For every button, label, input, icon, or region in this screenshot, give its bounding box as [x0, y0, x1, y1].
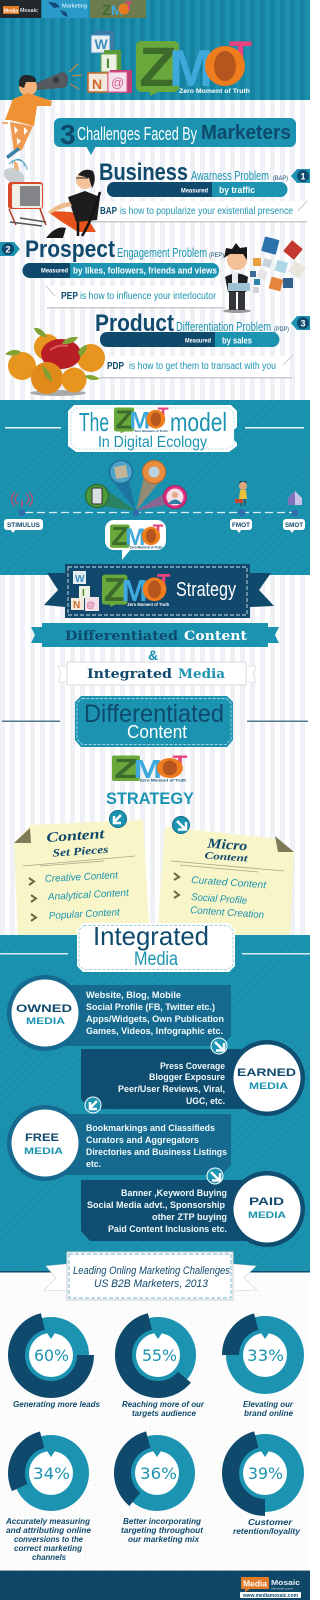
- ZMOT logo: header: T: [229, 32, 252, 79]
- heading: 3 challenges faced by marketers: [54, 118, 296, 155]
- ZMOT logo: model title: [114, 404, 169, 435]
- chart: donut 33 percent: [226, 1316, 304, 1418]
- heading: micro content: Micro: [206, 837, 248, 854]
- top navigation strip: Media: [4, 8, 19, 14]
- chart: donut 55 percent: targets audience: [132, 1409, 197, 1418]
- icons: social media cluster: [250, 236, 306, 293]
- ZMOT logo: strategy section: [112, 752, 188, 784]
- chart: donut 34 percent: Accurately measuring: [5, 1517, 90, 1526]
- text: earned media list: Press Coverage: [160, 1061, 225, 1071]
- background: model section teal: [0, 400, 310, 575]
- chart: donut 33 percent: brand online: [244, 1409, 294, 1418]
- chart: donut 36 percent: 36%: [140, 1464, 177, 1483]
- teal edge overlay: [0, 935, 310, 940]
- banner: WIN@ ZMOT strategy: [44, 564, 274, 618]
- ZMOT logo: banner: Z: [104, 572, 126, 609]
- panel: differentiated content heading: Differentiated: [84, 700, 224, 728]
- ZMOT logo: header: Zero Moment of Truth: [179, 89, 250, 95]
- heading: model: model: [170, 407, 227, 437]
- callout: ZMOT bubble: [105, 520, 166, 560]
- ZMOT logo: model title: Z: [115, 405, 133, 435]
- panel: integrated media heading: [77, 921, 235, 972]
- panel: content set pieces note: [14, 810, 150, 940]
- icon: arrow badge: [172, 816, 190, 834]
- icon: WIN@ blocks small: [71, 571, 99, 611]
- chart: donut 55 percent: Reaching more of our: [122, 1400, 205, 1409]
- logo: Media Mosaic: Mosaic: [271, 1578, 300, 1587]
- ZMOT logo: model title: Zero Moment of Truth: [134, 429, 168, 433]
- heading: prospect: Prospect: [25, 236, 115, 263]
- panel: earned media: EARNED: [237, 1067, 296, 1079]
- ZMOT logo: header: Z: [139, 35, 177, 98]
- panel: integrated media heading: Media: [134, 949, 178, 970]
- panel: differentiated content heading: Content: [127, 722, 187, 742]
- top navigation strip: [0, 0, 146, 19]
- nodes: [18, 509, 298, 516]
- heading: strategy: Strategy: [176, 579, 236, 601]
- text: PEP definition: [46, 286, 225, 308]
- logo: Media Mosaic: Differentiate yourself...: [271, 1586, 295, 1590]
- chart: donut 36 percent: [108, 1424, 206, 1544]
- panel: differentiated content heading: [75, 696, 233, 747]
- list: micro content: Social Profile: [191, 892, 248, 907]
- text: paid media list: other ZTP buying: [152, 1212, 227, 1222]
- measure bar: likes followers friends views: [22, 263, 219, 278]
- chart: donut 34 percent: 34%: [33, 1464, 70, 1483]
- chart: donut 39 percent: 39%: [248, 1464, 283, 1483]
- text: paid media list: Social Media advt., Sponsorship: [87, 1200, 225, 1210]
- heading: micro content: Content: [204, 851, 249, 865]
- measure bar: likes followers friends views: by likes, followers, friends and views: [73, 266, 217, 276]
- icon: WIN@ blocks small: W: [75, 574, 85, 585]
- chart: donut 34 percent: and attributing online: [6, 1526, 92, 1535]
- panel: micro content note: [157, 816, 294, 940]
- icon: WIN@ blocks: W: [94, 36, 108, 52]
- list: content set pieces: Popular Content: [49, 907, 121, 922]
- panel: ZMOT model title card: [68, 404, 237, 452]
- panel: product problem: [95, 310, 310, 378]
- divider: [171, 861, 284, 872]
- chart: donut 55 percent: 55%: [142, 1346, 177, 1365]
- badge: 3: 3: [300, 318, 306, 328]
- panel: business problem: [90, 159, 310, 222]
- icon: arrow badge free to paid: [207, 1168, 223, 1184]
- heading: content set pieces: Content: [46, 827, 106, 846]
- chart: donut 36 percent: targeting throughout: [121, 1526, 203, 1535]
- heading: micro content: [204, 837, 250, 865]
- icon: WIN@ blocks small: N: [73, 600, 80, 611]
- text: paid media list: Paid Content Inclusions etc.: [108, 1224, 227, 1234]
- icon: stimulus signal: [12, 492, 32, 507]
- illustration: man with megaphone on television: [1, 64, 82, 225]
- text: owned media list: Apps/Widgets, Own Publication: [86, 1014, 224, 1024]
- logo: Media Mosaic: www.mediamosaic.com: [242, 1593, 299, 1599]
- measure bar: by traffic: [107, 182, 288, 197]
- footer: [0, 1570, 310, 1600]
- label: SMOT: SMOT: [285, 522, 303, 529]
- chart: donut 34 percent: channels: [32, 1553, 67, 1562]
- heading: content set pieces: [46, 827, 109, 860]
- text: earned media list: Blogger Exposure: [149, 1072, 225, 1082]
- list: micro content: Curated Content: [191, 875, 268, 891]
- subheading: awareness problem: Awarness Problem: [191, 168, 269, 183]
- illustration: businessman with tablet: [223, 243, 251, 313]
- text: PEP definition: is how to influence your interlocutor: [80, 291, 217, 302]
- logo: Media Mosaic: [240, 1577, 301, 1599]
- background: integrated media section teal: [0, 935, 310, 1272]
- ZMOT logo: strategy section: M: [133, 756, 162, 784]
- ZMOT logo: banner: M: [121, 573, 147, 608]
- chart: donut 60 percent: [13, 1317, 101, 1409]
- list: content set pieces: [29, 870, 130, 922]
- background: header teal stripes: [0, 0, 310, 100]
- text: owned media list: Social Profile (FB, Twitter etc.): [86, 1002, 215, 1012]
- ZMOT logo: header: [136, 32, 252, 98]
- top navigation strip: M: [111, 2, 123, 18]
- list: content set pieces: Analytical Content: [47, 888, 130, 903]
- panel: earned media: [81, 1040, 305, 1116]
- banner: leading online marketing challenges: [44, 1252, 257, 1300]
- icon: arrow badge earned to free: [85, 1097, 101, 1113]
- badge: 1: 1: [300, 172, 306, 182]
- label: stimulus: [4, 519, 43, 533]
- ZMOT logo: bubble: [110, 522, 164, 551]
- top navigation strip: Mosaic: [20, 8, 38, 14]
- badge: 1: [291, 169, 310, 183]
- text: earned media list: UGC, etc.: [186, 1096, 225, 1106]
- ZMOT logo: bubble: Zero Moment of Truth: [130, 545, 162, 549]
- chart: donut 39 percent: Customer: [248, 1518, 293, 1527]
- text: paid media list: Banner ,Keyword Buying: [121, 1188, 227, 1198]
- panel: paid media: [81, 1171, 305, 1247]
- heading: 3 challenges faced by marketers: Challenges Faced By: [77, 124, 197, 144]
- ZMOT logo: bubble: M: [125, 524, 145, 551]
- panel: owned media: [7, 975, 231, 1051]
- label: stimulus: STIMULUS: [7, 522, 41, 529]
- chart: donut 39 percent: [226, 1434, 304, 1536]
- panel: owned media: OWNED: [16, 1003, 72, 1015]
- text: PEP definition: PEP: [61, 291, 78, 302]
- ZMOT logo: bubble: Z: [111, 523, 129, 551]
- badge: 2: 2: [6, 244, 11, 254]
- subheading: engagement problem: Engagement Problem: [117, 245, 207, 260]
- heading: 3 challenges faced by marketers: 3: [60, 119, 76, 150]
- text: free media list: Directories and Business Listings: [86, 1147, 227, 1157]
- background: challenges section: [0, 1272, 310, 1570]
- chart: donut 60 percent: 60%: [34, 1346, 69, 1365]
- ZMOT logo: bubble: T: [153, 522, 164, 543]
- icon: house: [288, 491, 302, 505]
- icon: shopper: [235, 481, 247, 506]
- chart: donut 34 percent: conversions to the: [14, 1535, 84, 1544]
- ZMOT logo: model title: M: [130, 408, 150, 435]
- ZMOT logo: model title: T: [158, 404, 169, 426]
- label: FMOT: FMOT: [232, 522, 250, 529]
- heading: 3 challenges faced by marketers: Marketers: [201, 122, 291, 144]
- ZMOT logo: strategy section: Zero Moment of Truth: [140, 778, 187, 782]
- icon: WIN@ blocks: [88, 31, 132, 93]
- measure bar: by sales: [100, 332, 280, 347]
- text: ampersand: &: [148, 647, 158, 663]
- subheading: differentiation problem: (PDP): [274, 327, 289, 333]
- chart: donut 55 percent: [109, 1306, 207, 1418]
- panel: paid media: PAID: [249, 1196, 284, 1208]
- heading: content set pieces: Set Pieces: [52, 844, 109, 860]
- ribbon: differentiated content: Differentiated: [65, 629, 178, 644]
- ZMOT logo: strategy section: T: [172, 752, 188, 775]
- ZMOT logo: strategy section: Z: [114, 753, 139, 784]
- ribbon: differentiated content: [31, 623, 279, 647]
- ZMOT logo: header: M: [169, 40, 213, 98]
- chart: donut 36 percent: Better incorporating: [123, 1517, 201, 1526]
- ribbon: integrated media: Media: [178, 667, 226, 682]
- text: earned media list: Peer/User Reviews, Viral,: [118, 1084, 225, 1094]
- chart: donut 36 percent: our marketing mix: [128, 1535, 200, 1544]
- text: free media list: [86, 1123, 227, 1169]
- top navigation strip: Marketing: [62, 4, 87, 10]
- text: paid media list: [87, 1188, 227, 1234]
- heading: business: Business: [99, 159, 188, 186]
- text: PDP definition: [100, 355, 293, 378]
- text: PDP definition: PDP: [107, 361, 124, 372]
- icon: WIN@ blocks: N: [92, 76, 102, 92]
- text: earned media list: [118, 1061, 225, 1106]
- chart: donut 33 percent: 33%: [247, 1346, 284, 1365]
- panel: owned media: MEDIA: [26, 1016, 65, 1027]
- panel: free media: MEDIA: [24, 1146, 63, 1157]
- text: free media list: Curators and Aggregators: [86, 1135, 199, 1145]
- measure bar: by sales: by sales: [222, 336, 252, 346]
- banner: leading online marketing challenges: Leading Onling Marketing Challenges: [73, 1265, 230, 1277]
- icon: WIN@ blocks: I: [106, 55, 110, 71]
- icon: arrow badge: [110, 810, 126, 828]
- text: BAP definition: BAP: [100, 206, 117, 217]
- panel: prospect problem: [0, 236, 225, 308]
- ZMOT logo: banner: T: [157, 571, 170, 598]
- badge: 2: [0, 242, 20, 256]
- label: FMOT: [230, 519, 252, 533]
- text: owned media list: [86, 990, 224, 1036]
- text: owned media list: Games, Videos, Infographic etc.: [86, 1026, 223, 1036]
- subheading: differentiation problem: Differentiation Problem: [176, 319, 271, 334]
- subheading: awareness problem: (BAP): [273, 176, 288, 182]
- label: SMOT: [283, 519, 305, 533]
- illustration: man on chair: [10, 170, 100, 238]
- logo: Media Mosaic: Media: [243, 1580, 268, 1588]
- panel: paid media: MEDIA: [248, 1210, 286, 1221]
- illustration: oranges and apple: [5, 328, 105, 396]
- icon: WIN@ blocks small: @: [86, 600, 95, 610]
- icon: WIN@ blocks: @: [111, 75, 124, 90]
- measure bar: likes followers friends views: Measured: [41, 268, 68, 274]
- ribbon: integrated media: Integrated: [87, 667, 172, 682]
- icon: WIN@ blocks small: I: [82, 588, 85, 599]
- subheading: engagement problem: (PEP): [209, 253, 224, 259]
- text: PDP definition: is how to get them to transact with you: [129, 361, 276, 372]
- text: free media list: Bookmarkings and Classifieds: [86, 1123, 215, 1133]
- chart: donut 60 percent: Generating more leads: [13, 1400, 101, 1409]
- chart: donut 34 percent: [5, 1427, 97, 1562]
- text: owned media list: Website, Blog, Mobile: [86, 990, 181, 1000]
- heading: product: Product: [95, 310, 174, 337]
- panel: free media: FREE: [25, 1132, 59, 1144]
- diagram: ZMOT timeline: [4, 460, 305, 560]
- text: BAP definition: [90, 201, 307, 222]
- fan: four sources: [86, 460, 186, 511]
- top navigation strip: Z: [102, 2, 111, 19]
- icon: arrow badge owned to earned: [211, 1038, 227, 1054]
- panel: earned media: MEDIA: [249, 1081, 288, 1092]
- ZMOT logo: banner: Zero Moment of Truth: [127, 602, 170, 607]
- chart: donut 33 percent: Elevating our: [243, 1400, 294, 1409]
- measure bar: by sales: Measured: [185, 338, 211, 344]
- chart: donut 34 percent: correct marketing: [14, 1544, 82, 1553]
- list: content set pieces: Creative Content: [45, 870, 119, 885]
- text: free media list: etc.: [86, 1159, 101, 1169]
- panel: free media: [7, 1105, 231, 1181]
- list: micro content: [174, 873, 268, 921]
- heading: the: The: [79, 407, 109, 437]
- measure bar: by traffic: by traffic: [219, 185, 255, 195]
- measure bar: by traffic: Measured: [181, 188, 208, 194]
- chart: donut 39 percent: retention/loyality: [233, 1527, 301, 1536]
- heading: strategy: STRATEGY: [106, 789, 195, 808]
- ZMOT logo: banner: [102, 571, 170, 609]
- ribbon: integrated media: [58, 662, 256, 685]
- list: micro content: Content Creation: [190, 905, 265, 921]
- ribbon: differentiated content: Content: [184, 629, 247, 644]
- subheading: in digital ecology: In Digital Ecology: [98, 434, 207, 451]
- badge: 3: [291, 316, 310, 330]
- panel: integrated media heading: Integrated: [93, 921, 209, 951]
- divider: [23, 856, 135, 866]
- banner: leading online marketing challenges: US B2B Marketers, 2013: [94, 1278, 209, 1290]
